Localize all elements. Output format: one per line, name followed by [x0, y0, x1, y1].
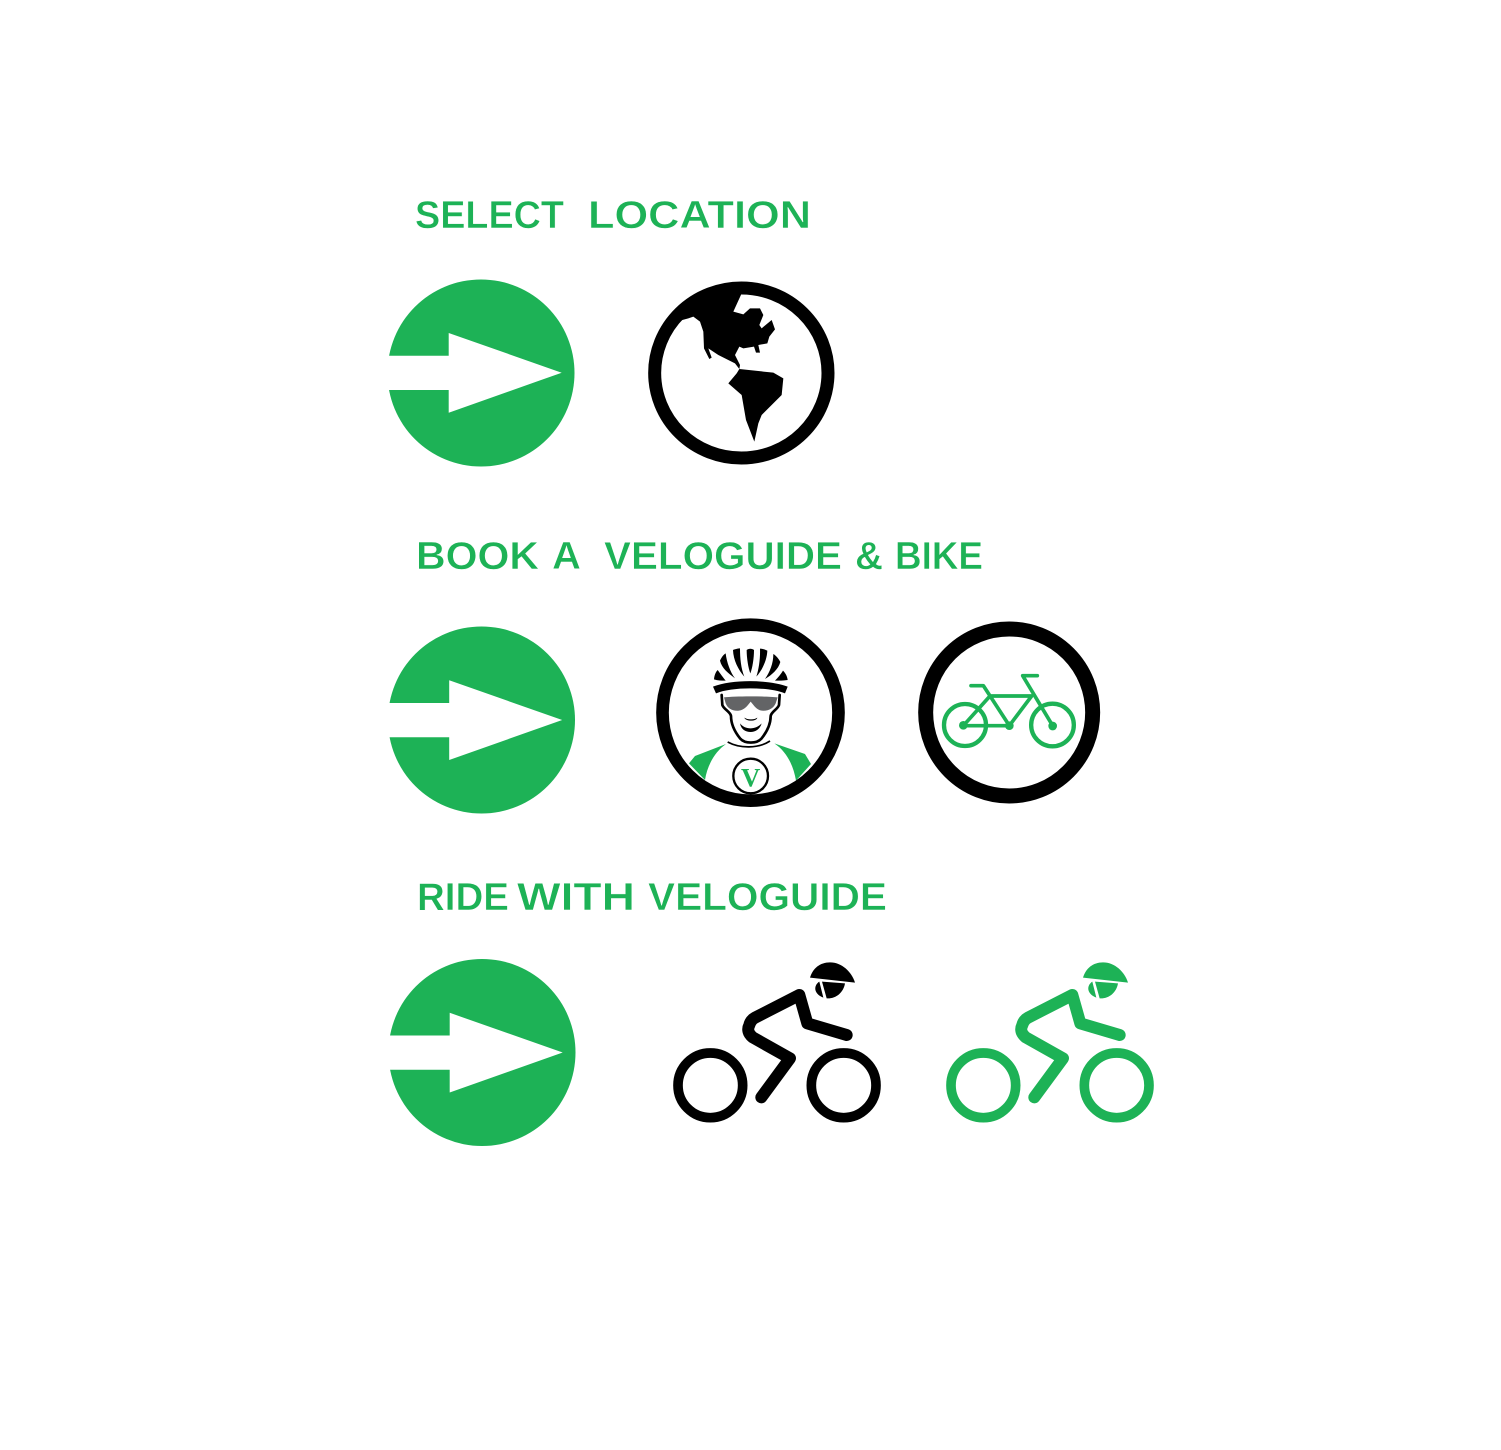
icon: arrow circle step 2 [386, 626, 575, 814]
heading: book a veloguide and bike [416, 535, 983, 578]
jersey sleeves [689, 743, 811, 781]
icon: arrow circle step 1 [386, 280, 574, 466]
icon: globe [655, 287, 828, 458]
heading: ride with veloguide: WITH [517, 876, 635, 919]
heading: ride with veloguide [417, 876, 887, 919]
glasses [724, 696, 778, 711]
collar [728, 741, 770, 747]
heading: book a veloguide and bike: VELOGUIDE [604, 535, 842, 578]
icon: arrow circle step 3 [386, 959, 576, 1146]
face outline [722, 695, 780, 743]
heading: book a veloguide and bike: A [552, 535, 581, 578]
heading: select location: LOCATION [588, 194, 811, 237]
nose and mouth [740, 718, 762, 732]
helmet [713, 648, 788, 693]
heading: book a veloguide and bike: BIKE [895, 535, 983, 578]
icon: veloguide rider portrait [662, 625, 838, 801]
icon: bicycle in ring [926, 629, 1093, 796]
chest badge [733, 759, 768, 793]
heading: select location [415, 194, 811, 237]
heading: select location: SELECT [415, 194, 564, 237]
heading: ride with veloguide: RIDE [417, 876, 509, 919]
icon: black cyclist [678, 962, 876, 1118]
heading: book a veloguide and bike: & [855, 535, 883, 578]
heading: book a veloguide and bike: BOOK [416, 535, 539, 578]
chest badge: V [741, 762, 760, 792]
outer ring [662, 625, 838, 801]
icon: green cyclist [951, 962, 1149, 1118]
heading: ride with veloguide: VELOGUIDE [648, 876, 887, 919]
